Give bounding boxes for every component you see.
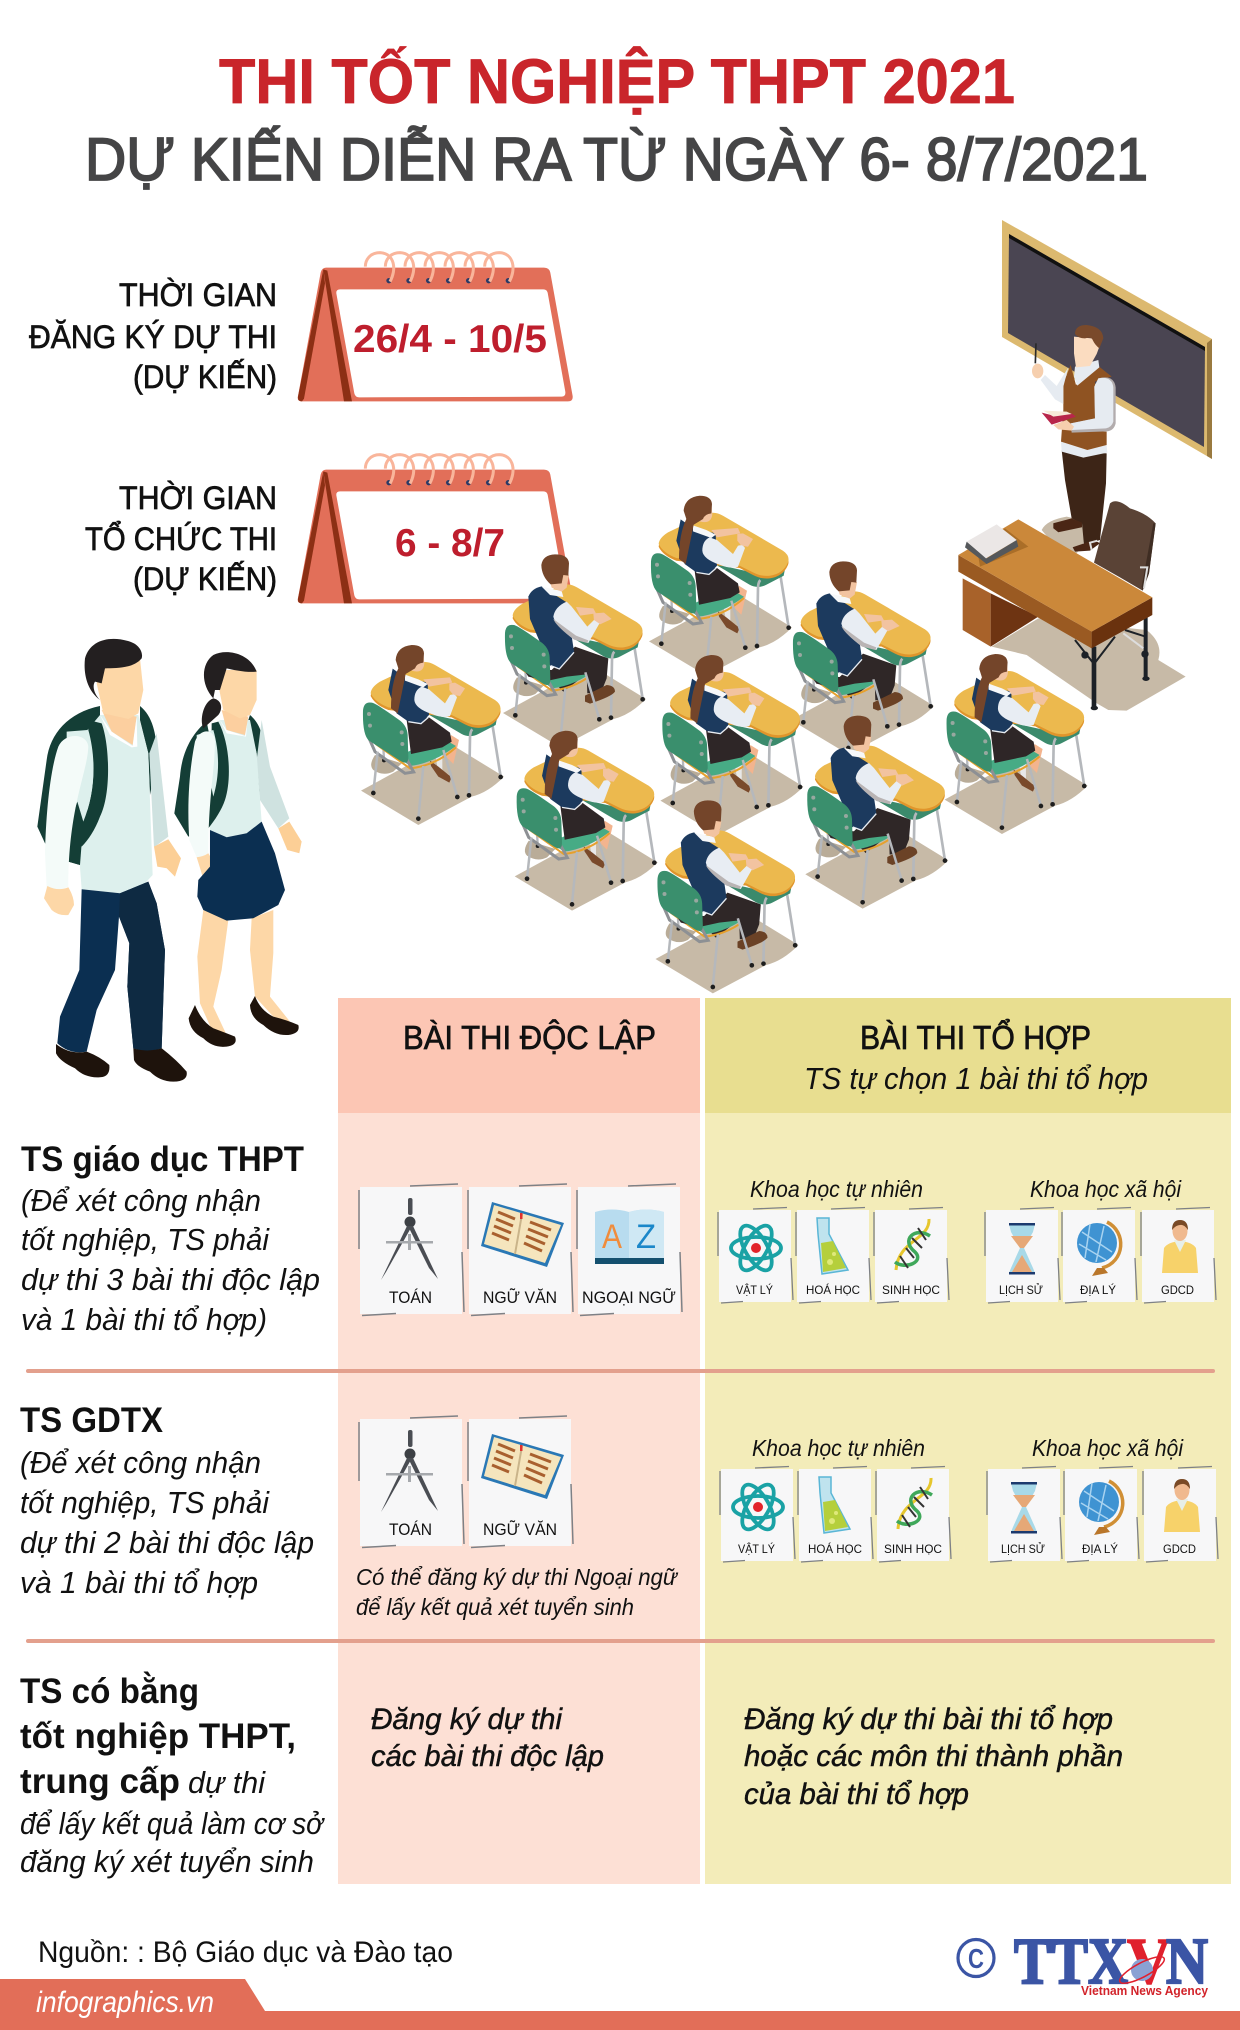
row label: general education candidates xyxy=(21,1140,320,1337)
logo: TTXVN: Vietnam News Agency xyxy=(1081,1983,1209,1998)
label: exam period: (DỰ KIẾN) xyxy=(133,561,277,597)
note: optional foreign language: Có thể đăng ký dự thi Ngoại ngữ xyxy=(356,1564,678,1590)
card: civics row 2 xyxy=(1143,1466,1218,1562)
row label: diploma holders: dự thi xyxy=(188,1765,266,1800)
text: diploma holders combined exams xyxy=(744,1703,1123,1811)
card: biology row 2: SINH HỌC xyxy=(884,1542,942,1556)
subject group: social sciences row 2: Khoa học xã hội xyxy=(1032,1435,1184,1461)
panel: combined exams column xyxy=(705,998,1231,1884)
subject group: social sciences row 1: Khoa học xã hội xyxy=(1030,1176,1182,1202)
title: THI TỐT NGHIỆP THPT 2021 xyxy=(219,46,1015,117)
subject card: literature row 2: NGỮ VĂN xyxy=(483,1520,557,1539)
illustration: two students with backpacks xyxy=(37,639,302,1082)
subject card: literature row 2 xyxy=(468,1416,573,1548)
source: Nguồn: : Bộ Giáo dục và Đào tạo xyxy=(38,1936,453,1969)
card: geography xyxy=(1062,1208,1137,1303)
card: civics row 2: GDCD xyxy=(1163,1542,1196,1556)
footer bar: infographics.vn xyxy=(36,1986,214,2019)
calendar: registration dates: 26/4 - 10/5 xyxy=(353,318,547,361)
row label: continuing education candidates: và 1 bài thi tổ hợp xyxy=(20,1565,258,1600)
card: physics row 2 xyxy=(720,1466,795,1562)
text: diploma holders independent exams: các bài thi độc lập xyxy=(371,1740,604,1773)
illustration: students in the exam room xyxy=(361,496,1088,993)
text: diploma holders combined exams: hoặc các môn thi thành phần xyxy=(744,1740,1123,1773)
row label: diploma holders: để lấy kết quả làm cơ sở xyxy=(20,1806,325,1841)
note: optional foreign language: để lấy kết quả xét tuyển sinh xyxy=(356,1594,634,1620)
card: chemistry xyxy=(796,1208,871,1303)
subject group: natural sciences row 2 xyxy=(720,1435,951,1562)
row label: general education candidates: và 1 bài thi tổ hợp) xyxy=(21,1302,267,1337)
card: physics xyxy=(718,1208,793,1303)
row label: diploma holders: tốt nghiệp THPT, xyxy=(20,1717,296,1756)
illustration: teacher xyxy=(1032,325,1116,552)
logo: TTXVN: TTX xyxy=(1014,1925,1128,1998)
logo: TTXVN: C xyxy=(968,1943,984,1974)
row label: general education candidates: dự thi 3 bài thi độc lập xyxy=(21,1262,320,1297)
illustration: blackboard xyxy=(1002,220,1212,459)
heading: independent exams: BÀI THI ĐỘC LẬP xyxy=(403,1019,656,1056)
logo: TTXVN: V xyxy=(1127,1925,1171,1998)
card: civics: GDCD xyxy=(1161,1283,1194,1297)
label: registration period xyxy=(29,277,277,395)
card: history: LỊCH SỬ xyxy=(999,1282,1043,1297)
girl student xyxy=(174,652,302,1047)
subject card: foreign language: NGOẠI NGỮ xyxy=(582,1288,676,1307)
calendar: registration dates xyxy=(298,253,573,401)
row label: diploma holders xyxy=(20,1671,325,1879)
card: biology row 2 xyxy=(876,1466,951,1562)
heading: combined exams: TS tự chọn 1 bài thi tổ hợp xyxy=(804,1061,1148,1096)
card: chemistry row 2: HOÁ HỌC xyxy=(808,1541,862,1556)
row label: continuing education candidates: (Để xét công nhận xyxy=(20,1445,261,1480)
illustration: desk and teacher shadow xyxy=(992,517,1186,711)
row label: continuing education candidates: dự thi 2 bài thi độc lập xyxy=(20,1525,314,1560)
label: registration period: (DỰ KIẾN) xyxy=(133,359,277,395)
illustration: teacher chair and desk xyxy=(958,501,1156,710)
heading: combined exams xyxy=(804,1019,1148,1096)
card: history row 2: LỊCH SỬ xyxy=(1001,1541,1045,1556)
desk legs xyxy=(1075,617,1150,710)
row label: continuing education candidates: TS GDTX xyxy=(20,1401,164,1440)
label: registration period: THỜI GIAN xyxy=(119,277,277,313)
label: exam period: TỔ CHỨC THI xyxy=(85,521,277,557)
text: diploma holders independent exams: Đăng ký dự thi xyxy=(371,1703,563,1736)
subject card: literature xyxy=(468,1184,573,1316)
row label: diploma holders: trung cấp xyxy=(20,1762,180,1801)
card: physics: VẬT LÝ xyxy=(736,1282,773,1297)
subject card: literature: NGỮ VĂN xyxy=(483,1288,557,1307)
subject card: math: TOÁN xyxy=(389,1288,432,1307)
subject card: foreign language xyxy=(577,1184,682,1316)
label: exam period: THỜI GIAN xyxy=(119,480,277,516)
subject group: natural sciences row 1 xyxy=(718,1176,949,1303)
subject group: natural sciences row 2: Khoa học tự nhiên xyxy=(752,1435,925,1461)
card: biology: SINH HỌC xyxy=(882,1283,940,1297)
card: chemistry: HOÁ HỌC xyxy=(806,1282,860,1297)
title: DỰ KIẾN DIỄN RA TỪ NGÀY 6- 8/7/2021 xyxy=(85,126,1148,193)
logo: TTXVN xyxy=(958,1925,1209,1998)
boy student xyxy=(37,639,187,1082)
title xyxy=(85,46,1148,193)
card: physics row 2: VẬT LÝ xyxy=(738,1541,775,1556)
row label: general education candidates: TS giáo dục THPT xyxy=(21,1140,304,1179)
row label: diploma holders: đăng ký xét tuyển sinh xyxy=(20,1844,314,1879)
logo: TTXVN: N xyxy=(1166,1925,1208,1998)
panel: independent exams column xyxy=(338,998,700,1884)
note: optional foreign language xyxy=(356,1564,678,1620)
card: history xyxy=(985,1208,1060,1303)
text: diploma holders combined exams: của bài thi tổ hợp xyxy=(744,1778,969,1811)
row label: general education candidates: tốt nghiệp, TS phải xyxy=(21,1222,270,1257)
row label: continuing education candidates: tốt nghiệp, TS phải xyxy=(20,1485,270,1520)
card: history row 2 xyxy=(987,1466,1062,1562)
label: exam period xyxy=(85,480,277,597)
card: geography row 2 xyxy=(1064,1466,1139,1562)
row label: continuing education candidates xyxy=(20,1401,314,1600)
text: diploma holders independent exams xyxy=(371,1703,604,1773)
subject group: social sciences row 1 xyxy=(985,1176,1216,1303)
heading: combined exams: BÀI THI TỔ HỢP xyxy=(860,1019,1091,1056)
label: registration period: ĐĂNG KÝ DỰ THI xyxy=(29,319,277,355)
row label: general education candidates: (Để xét công nhận xyxy=(21,1183,261,1218)
card: biology xyxy=(874,1208,949,1303)
text: diploma holders combined exams: Đăng ký dự thi bài thi tổ hợp xyxy=(744,1703,1113,1736)
footer bar xyxy=(0,1979,1240,2030)
calendar: exam dates: 6 - 8/7 xyxy=(395,522,505,565)
card: civics xyxy=(1141,1208,1216,1303)
row label: diploma holders: TS có bằng xyxy=(20,1671,199,1711)
subject card: math xyxy=(359,1184,464,1316)
subject group: social sciences row 2 xyxy=(987,1435,1218,1562)
subject card: math row 2 xyxy=(359,1416,464,1548)
card: chemistry row 2 xyxy=(798,1466,873,1562)
subject group: natural sciences row 1: Khoa học tự nhiên xyxy=(750,1176,923,1202)
card: geography: ĐỊA LÝ xyxy=(1080,1282,1116,1297)
card: geography row 2: ĐỊA LÝ xyxy=(1082,1541,1118,1556)
calendar: exam dates xyxy=(298,455,573,603)
subject card: math row 2: TOÁN xyxy=(389,1520,432,1539)
